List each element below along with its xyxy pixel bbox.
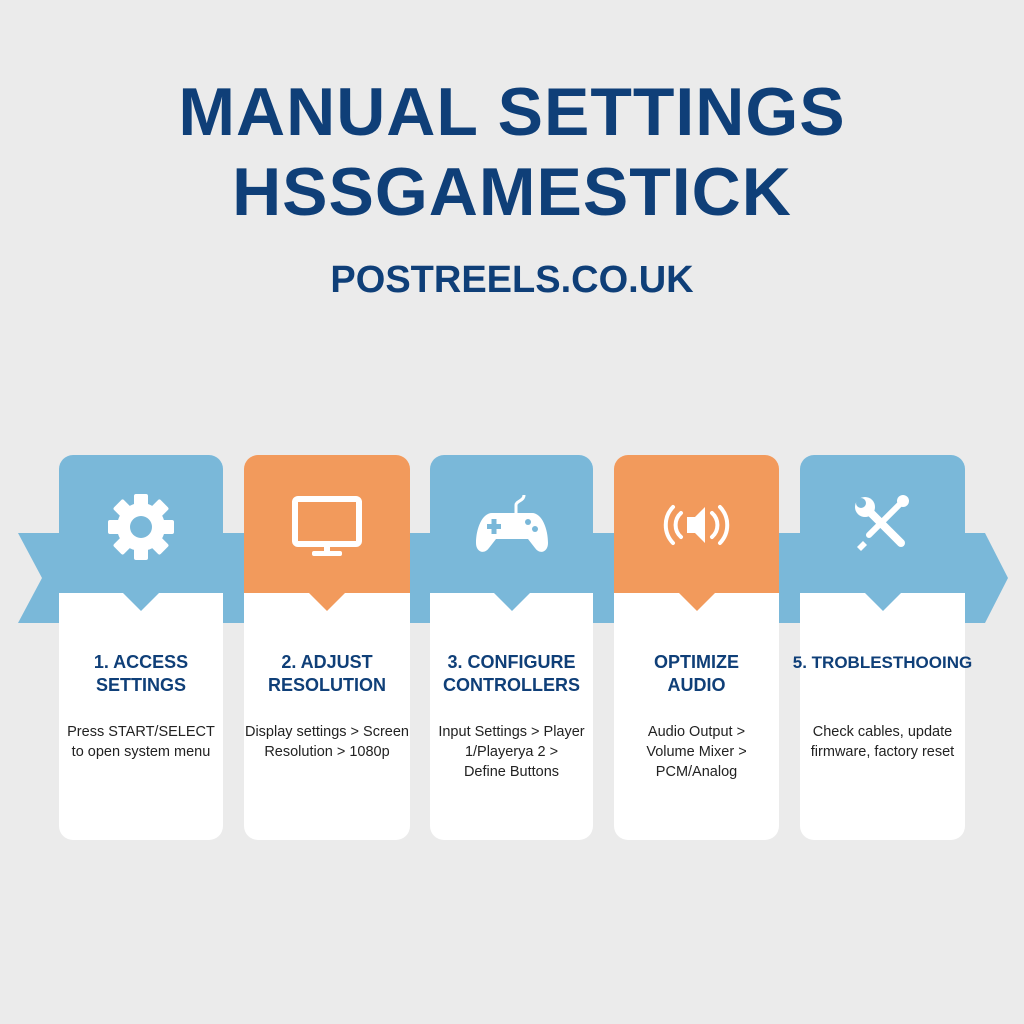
- heading 2: RESOLUTION: [268, 675, 386, 695]
- text 2: Resolution > 1080p: [264, 744, 390, 760]
- title: MANUAL SETTINGS: [178, 74, 846, 150]
- heading 3: CONTROLLERS: [443, 675, 580, 695]
- heading 1: SETTINGS: [96, 675, 186, 695]
- text 2: [245, 724, 409, 760]
- heading 4: AUDIO: [668, 675, 726, 695]
- text 5: firmware, factory reset: [811, 744, 954, 760]
- heading 1: 1. ACCESS: [94, 652, 188, 672]
- text 5: Check cables, update: [813, 724, 952, 740]
- heading 4: [654, 652, 739, 695]
- heading 3: [443, 652, 580, 695]
- text 1: to open system menu: [72, 744, 210, 760]
- heading 3: 3. CONFIGURE: [447, 652, 576, 672]
- card 3: [430, 455, 593, 840]
- text 3: 1/Playerya 2 >: [465, 744, 558, 760]
- text 1: Press START/SELECT: [67, 724, 215, 740]
- heading 2: 2. ADJUST: [281, 652, 373, 672]
- heading 5: 5. TROBLESTHOOING: [793, 653, 972, 672]
- text 2: Display settings > Screen: [245, 724, 409, 740]
- title: [178, 74, 846, 230]
- icon: gamepad: [476, 495, 548, 552]
- text 5: [810, 724, 954, 760]
- text 3: [438, 724, 585, 780]
- icon: gear: [108, 494, 174, 560]
- card 4: [614, 455, 779, 840]
- heading 2: [268, 652, 386, 695]
- icon: speaker: [664, 504, 730, 546]
- heading 4: OPTIMIZE: [654, 652, 739, 672]
- subtitle: POSTREELS.CO.UK: [330, 259, 694, 301]
- text 4: Volume Mixer >: [646, 744, 747, 760]
- icon: monitor: [292, 496, 362, 556]
- text 4: Audio Output >: [648, 724, 745, 740]
- text 3: Define Buttons: [464, 764, 559, 780]
- title: HSSGAMESTICK: [232, 154, 792, 230]
- text 1: [67, 724, 215, 760]
- card 2: [244, 455, 410, 840]
- text 4: PCM/Analog: [656, 764, 737, 780]
- icon: tools: [855, 495, 909, 551]
- card 5: [800, 455, 965, 840]
- heading 1: [94, 652, 188, 695]
- text 3: Input Settings > Player: [438, 724, 585, 740]
- card 1: [59, 455, 223, 840]
- text 4: [646, 724, 747, 780]
